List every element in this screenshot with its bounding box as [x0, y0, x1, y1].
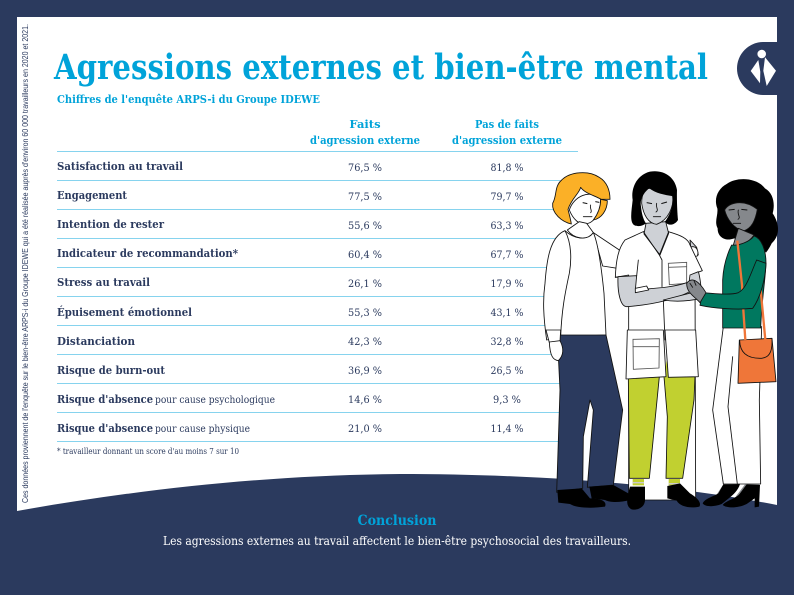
- white panel with curved bottom: [17, 17, 777, 511]
- conclusion text: Les agressions externes au travail affectent le bien-être psychosocial des travailleurs.: [163, 534, 631, 548]
- figure: woman in green with orange bag: [687, 179, 778, 507]
- table rows: [57, 159, 524, 435]
- table rows: 79,7 %: [490, 192, 524, 203]
- table rows: Satisfaction au travail: [57, 159, 184, 173]
- table headers: d'agression externe: [452, 133, 562, 147]
- table rows: Risque d'absence: [57, 421, 153, 435]
- table rows: 17,9 %: [490, 279, 524, 290]
- table rows: 14,6 %: [348, 395, 382, 406]
- table rows: Intention de rester: [57, 217, 165, 231]
- table rows: Épuisement émotionnel: [57, 305, 193, 319]
- table rows: Stress au travail: [57, 275, 151, 289]
- table rows: Risque d'absence: [57, 392, 153, 406]
- table rows: Distanciation: [57, 334, 136, 348]
- figure: woman with orange hair: [544, 173, 630, 508]
- table rows: 60,4 %: [348, 250, 382, 261]
- table rows: 55,6 %: [348, 221, 382, 232]
- footnote: * travailleur donnant un score d'au moins 7 sur 10: [57, 447, 239, 456]
- conclusion heading: Conclusion: [358, 513, 437, 529]
- table headers: d'agression externe: [310, 133, 420, 147]
- table rows: 11,4 %: [490, 424, 524, 435]
- table headers: Faits: [349, 117, 381, 131]
- table rows: 81,8 %: [490, 163, 524, 174]
- curly black hair: [716, 179, 778, 253]
- subtitle: Chiffres de l'enquête ARPS-i du Groupe IDEWE: [57, 92, 320, 106]
- table rows: 32,8 %: [490, 337, 524, 348]
- table rows: 21,0 %: [348, 424, 382, 435]
- bag straps: [737, 241, 765, 340]
- figure: nurse: [615, 171, 702, 510]
- table rows: Indicateur de recommandation*: [57, 246, 238, 260]
- green sweater body: [723, 236, 766, 328]
- table rows: 9,3 %: [493, 395, 521, 406]
- table rows: 76,5 %: [348, 163, 382, 174]
- table rows: Engagement: [57, 188, 128, 202]
- green sleeve: [700, 260, 766, 309]
- table rows: 55,3 %: [348, 308, 382, 319]
- table rows: 36,9 %: [348, 366, 382, 377]
- table headers: [310, 117, 562, 147]
- table headers: Pas de faits: [475, 117, 539, 131]
- table rows: 26,1 %: [348, 279, 382, 290]
- table rows: Risque de burn-out: [57, 363, 166, 377]
- table rows: 43,1 %: [490, 308, 524, 319]
- table rows: pour cause psychologique: [155, 395, 275, 406]
- table rows: 67,7 %: [490, 250, 524, 261]
- table rows: 77,5 %: [348, 192, 382, 203]
- logo: [737, 42, 777, 95]
- table rows: 26,5 %: [490, 366, 524, 377]
- table rows: 42,3 %: [348, 337, 382, 348]
- table rows: pour cause physique: [155, 424, 250, 435]
- table rows: 63,3 %: [490, 221, 524, 232]
